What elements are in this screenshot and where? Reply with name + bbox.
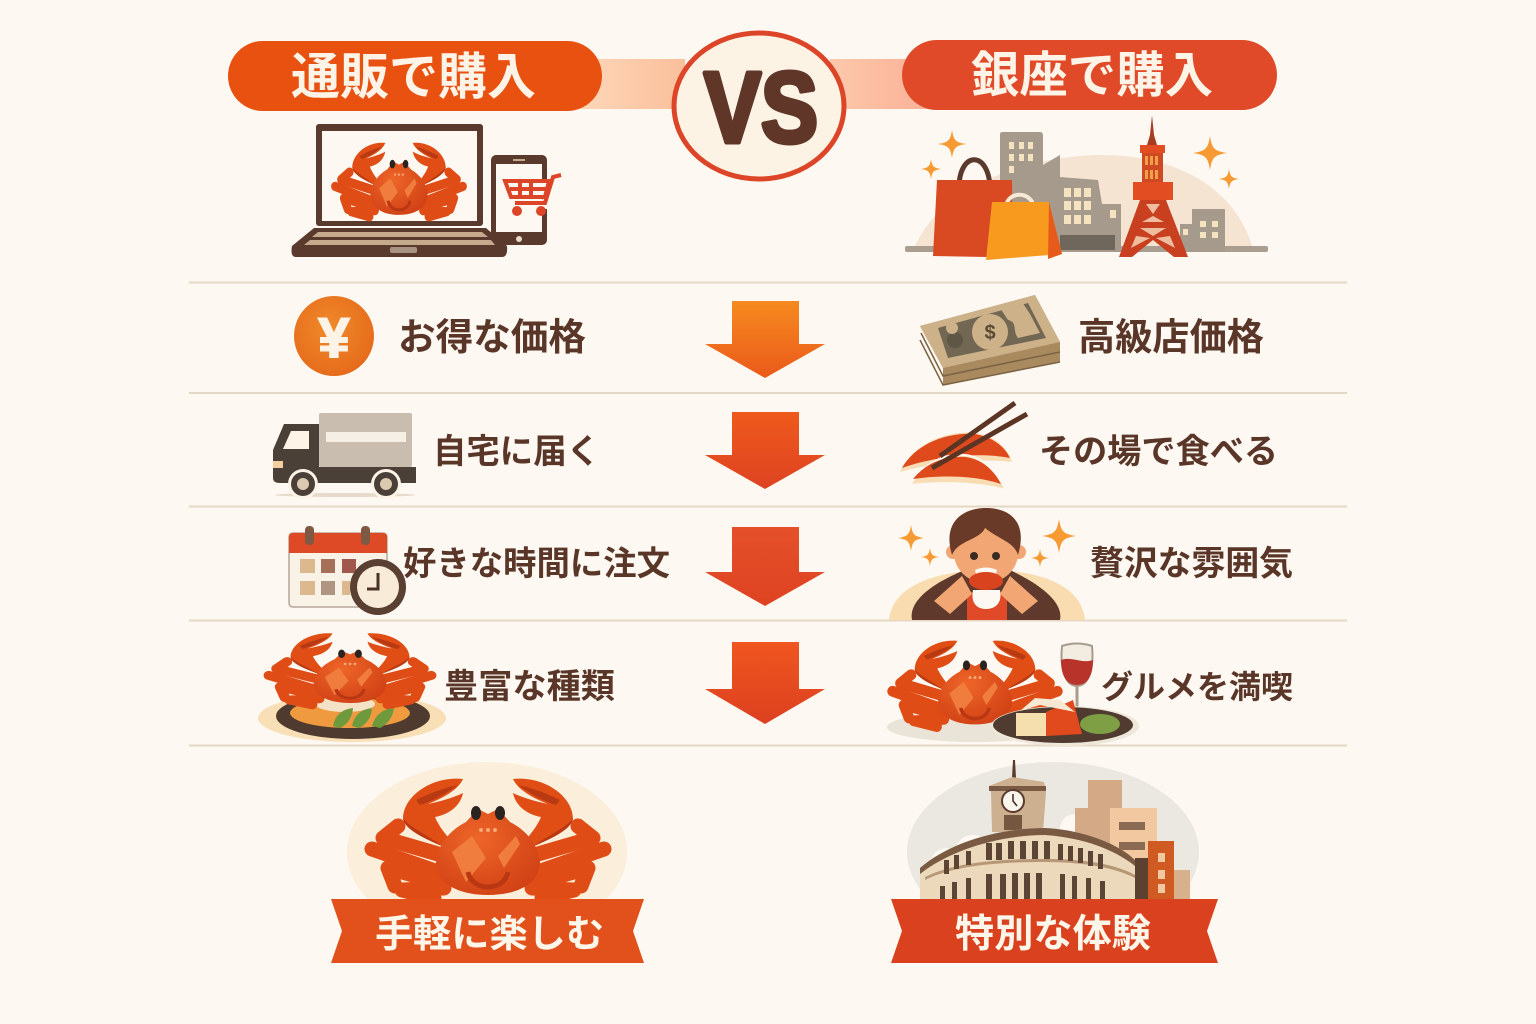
- icon: crab legs and chopsticks: [900, 403, 1027, 490]
- header: mail order: [228, 41, 602, 111]
- text: wide variety: 豊富な種類: [444, 668, 615, 706]
- icon: calendar and clock: [289, 526, 406, 615]
- icon: crab, wine and gourmet plate: [887, 641, 1139, 746]
- text: enjoy gourmet: グルメを満喫: [1101, 669, 1293, 705]
- ribbon: enjoy casually: 手軽に楽しむ: [375, 914, 604, 956]
- icon: yen coin: ¥: [318, 306, 350, 369]
- text: eat on the spot: その場で食べる: [1039, 433, 1278, 471]
- text: home delivery: 自宅に届く: [433, 433, 600, 471]
- row divider lines: [189, 282, 1347, 746]
- header: mail order: 通販で購入: [291, 49, 536, 105]
- connector band right: [830, 59, 935, 109]
- arrow row 3: [705, 527, 825, 606]
- arrow row 2: [705, 412, 825, 489]
- arrow row 4: [705, 642, 825, 724]
- header: Ginza: [902, 40, 1277, 110]
- text: order anytime: 好きな時間に注文: [403, 546, 670, 583]
- icon: Ginza shopping city: [905, 115, 1268, 260]
- connector band left: [575, 59, 685, 109]
- arrow row 1: [705, 301, 825, 378]
- icon: person eating crab: [889, 508, 1085, 620]
- icon: yen coin: [294, 296, 374, 376]
- icon: laptop and phone with crab: [292, 124, 562, 257]
- icon: stack of money: $: [984, 322, 996, 344]
- illustration: Ginza building: [907, 760, 1199, 942]
- illustration: large crab: [347, 762, 627, 942]
- ribbon: special experience: [891, 899, 1218, 963]
- text: good price: お得な価格: [398, 316, 586, 358]
- header: Ginza: 銀座で購入: [971, 49, 1213, 103]
- ribbon: special experience: 特別な体験: [955, 913, 1151, 956]
- icon: crab on a plate: [258, 633, 446, 742]
- VS badge: VS: [704, 52, 818, 164]
- VS badge: [674, 33, 844, 179]
- icon: delivery truck: [273, 413, 416, 499]
- text: luxurious atmosphere: 贅沢な雰囲気: [1090, 545, 1293, 583]
- text: luxury shop price: 高級店価格: [1078, 316, 1264, 358]
- ribbon: enjoy casually: [331, 899, 644, 963]
- icon: stack of money: [920, 295, 1060, 385]
